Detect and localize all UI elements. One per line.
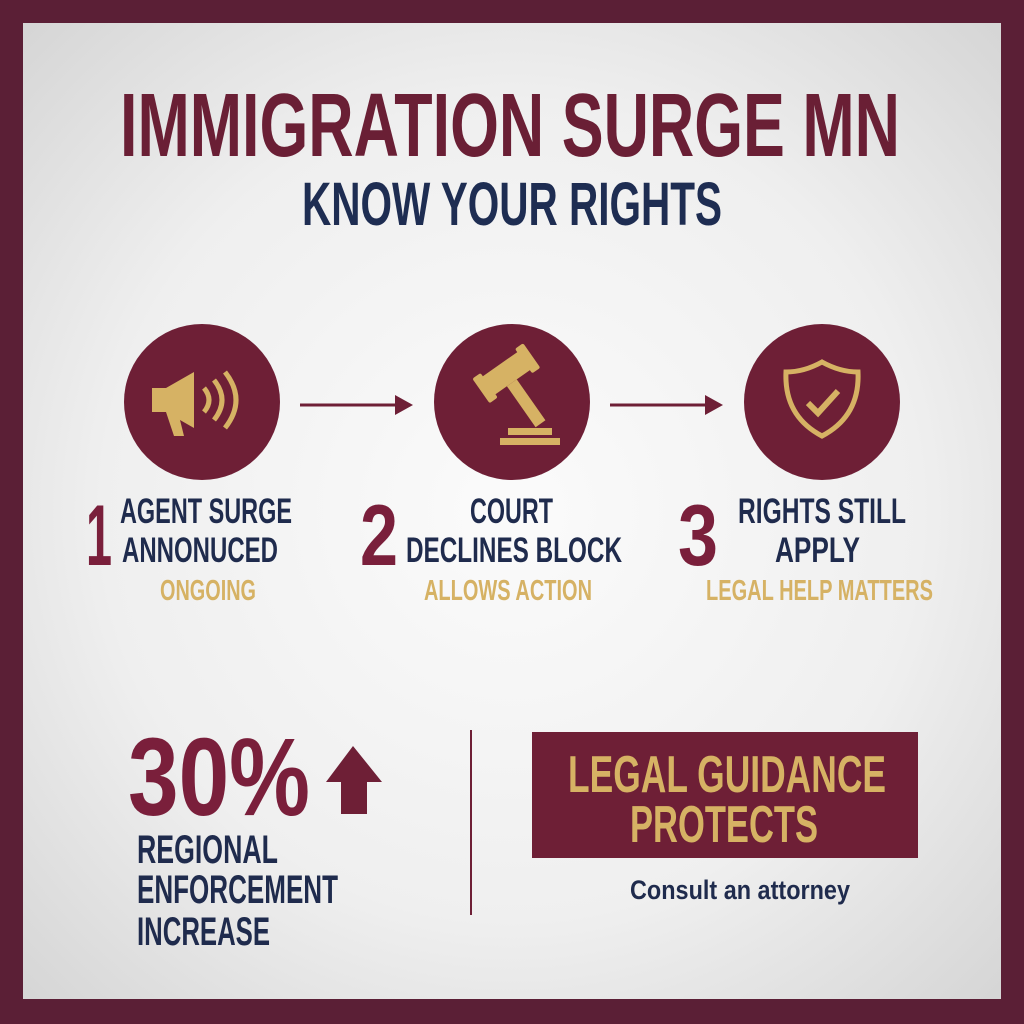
- step 2: COURT: [470, 492, 553, 531]
- step 1: ANNONUCED: [122, 531, 278, 570]
- step 1: [86, 488, 292, 607]
- subtitle: KNOW YOUR RIGHTS: [302, 170, 722, 238]
- consult text: Consult an attorney: [630, 875, 850, 905]
- stat: 30%: REGIONAL: [137, 828, 278, 872]
- arrow 2: [610, 395, 723, 415]
- icon: megaphone: [124, 324, 280, 480]
- step 3: 3: [678, 488, 718, 584]
- step 3: RIGHTS STILL: [738, 492, 906, 531]
- stat: 30%: ENFORCEMENT: [137, 868, 338, 912]
- step 3: [678, 488, 933, 607]
- step 2: DECLINES BLOCK: [406, 531, 622, 570]
- icon: shield check: [744, 324, 900, 480]
- callout box: [532, 732, 918, 858]
- step 1: 1: [86, 488, 112, 584]
- step 2: [360, 488, 622, 607]
- icon: gavel: [434, 324, 590, 480]
- step 1: AGENT SURGE: [120, 492, 292, 531]
- stat: 30%: 30%: [128, 716, 310, 839]
- step 2: ALLOWS ACTION: [424, 575, 592, 607]
- stat: 30%: [128, 716, 382, 954]
- arrow 1: [300, 395, 413, 415]
- step 3: APPLY: [775, 531, 860, 570]
- callout box: LEGAL GUIDANCE: [568, 746, 886, 804]
- step 2: 2: [360, 488, 398, 584]
- callout box: PROTECTS: [630, 796, 818, 854]
- stat: 30%: INCREASE: [137, 910, 270, 954]
- step 1: ONGOING: [160, 575, 256, 607]
